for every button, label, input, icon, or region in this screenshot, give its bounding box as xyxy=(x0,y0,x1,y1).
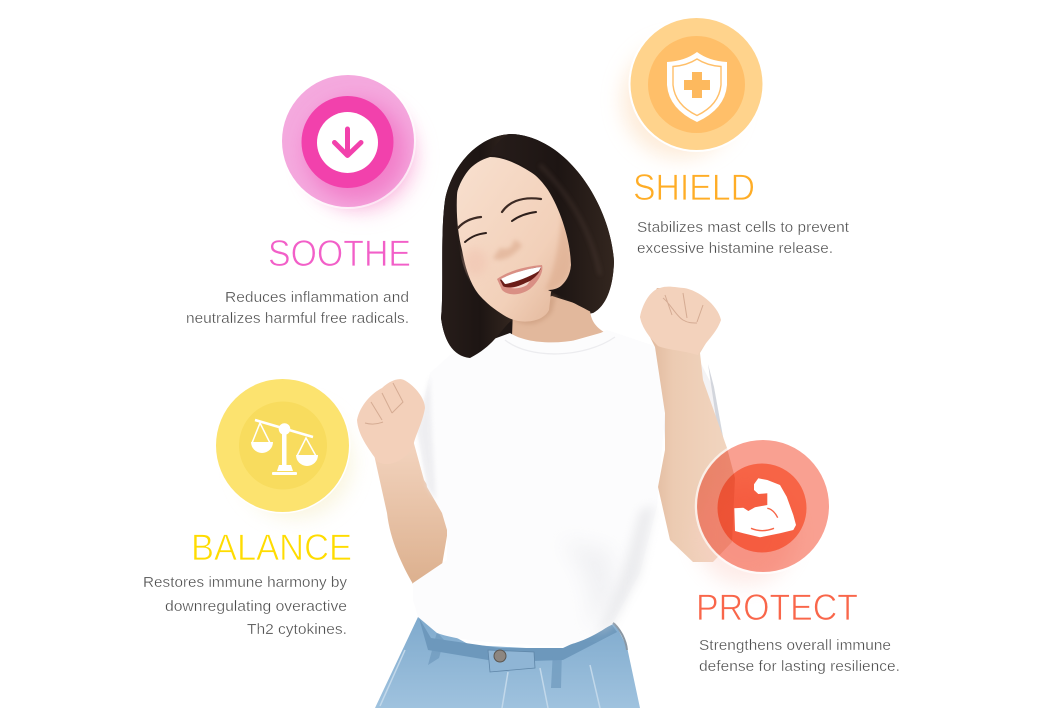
protect glow xyxy=(695,485,795,585)
text: balance description: downregulating overactive xyxy=(165,598,347,615)
text: protect description xyxy=(699,637,900,675)
text: balance description xyxy=(143,574,348,638)
heading: protect: PROTECT xyxy=(696,587,858,628)
panel: balance xyxy=(143,378,352,638)
shield badge xyxy=(628,16,764,152)
nose xyxy=(493,240,522,260)
cheek blush xyxy=(463,248,487,276)
mouth xyxy=(497,265,542,294)
neck shadow xyxy=(512,296,556,324)
face xyxy=(457,157,571,322)
protect badge xyxy=(697,440,829,572)
balance glow xyxy=(240,406,352,518)
hair back xyxy=(441,134,614,358)
text: balance description: Th2 cytokines. xyxy=(247,621,347,638)
heading: balance: BALANCE xyxy=(191,527,352,568)
protect ring xyxy=(696,439,830,573)
panel: shield xyxy=(622,16,850,257)
button xyxy=(494,650,506,662)
icon: flexed arm xyxy=(734,478,796,537)
text: protect description: Strengthens overall immune xyxy=(699,637,891,654)
text: balance description: Restores immune harmony by xyxy=(143,574,348,591)
text: soothe description xyxy=(186,289,409,327)
text: shield description: excessive histamine release. xyxy=(637,240,833,257)
text: soothe description: neutralizes harmful free radicals. xyxy=(186,310,409,327)
left fist xyxy=(357,379,425,464)
shield glow xyxy=(622,42,738,158)
text: shield description xyxy=(637,219,850,257)
soothe badge xyxy=(280,73,416,209)
right fist xyxy=(640,287,721,355)
eyes xyxy=(465,212,536,242)
right sleeve xyxy=(655,345,724,470)
left arm xyxy=(373,440,448,584)
eyebrows xyxy=(458,198,541,228)
illustration: woman xyxy=(357,134,735,708)
icon: scales xyxy=(251,420,318,475)
text: soothe description: Reduces inflammation and xyxy=(225,289,409,306)
heading: shield: SHIELD xyxy=(633,167,755,208)
text: shield description: Stabilizes mast cells to prevent xyxy=(637,219,850,236)
soothe glow xyxy=(306,101,418,213)
panel: soothe xyxy=(186,73,418,327)
neck xyxy=(512,296,604,350)
text: protect description: defense for lasting resilience. xyxy=(699,658,900,675)
right arm xyxy=(640,288,735,562)
balance badge xyxy=(214,378,350,514)
icon: shield with cross xyxy=(667,52,727,122)
panel: protect xyxy=(695,439,900,675)
heading: soothe: SOOTHE xyxy=(268,233,411,274)
shirt xyxy=(413,330,665,646)
jeans xyxy=(375,617,640,708)
hair front xyxy=(441,134,512,358)
icon: down arrow xyxy=(334,129,361,156)
